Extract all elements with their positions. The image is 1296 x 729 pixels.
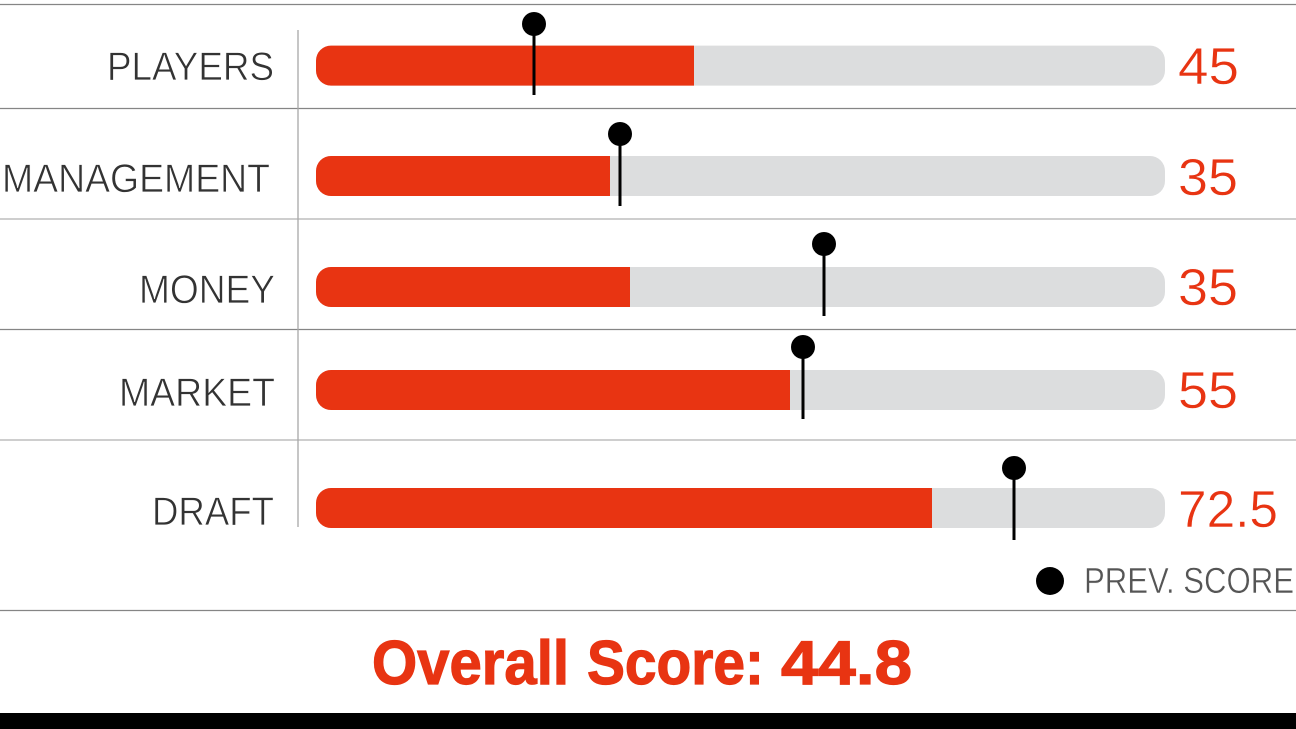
row: players xyxy=(107,12,1239,96)
row: market xyxy=(119,335,1238,420)
bar track: players xyxy=(316,46,1165,86)
bar track: draft xyxy=(316,488,1165,528)
label: market: MARKET xyxy=(119,371,275,415)
legend dot xyxy=(1036,567,1064,595)
label: management: MANAGEMENT xyxy=(2,157,270,201)
bar value: management 35 xyxy=(316,156,610,196)
bar value: draft 72.5 xyxy=(316,488,932,528)
row: draft xyxy=(152,456,1278,540)
marker: draft previous score xyxy=(1002,456,1026,540)
value: players: 45 xyxy=(1178,38,1239,96)
marker: players previous score xyxy=(522,12,546,95)
bar track: market xyxy=(316,370,1165,410)
value: draft: 72.5 xyxy=(1178,481,1278,539)
row: money xyxy=(139,232,1238,317)
legend: previous score xyxy=(1036,560,1294,601)
marker: money previous score xyxy=(812,232,836,316)
marker: market previous score xyxy=(791,335,815,419)
label: money: MONEY xyxy=(139,268,275,312)
bar value: market 55 xyxy=(316,370,790,410)
bottom black band xyxy=(0,713,1296,729)
bar track: money xyxy=(316,267,1165,307)
bar value: players 45 xyxy=(316,46,694,86)
overall score: 44.8 xyxy=(781,629,912,698)
marker: management previous score xyxy=(608,122,632,206)
overall score: Score: xyxy=(587,629,764,698)
row: management xyxy=(2,122,1238,207)
bar track: management xyxy=(316,156,1165,196)
bar value: money 35 xyxy=(316,267,630,307)
label: players: PLAYERS xyxy=(107,45,274,89)
overall score: Overall xyxy=(372,629,569,698)
value: market: 55 xyxy=(1178,362,1238,420)
value: money: 35 xyxy=(1178,259,1238,317)
value: management: 35 xyxy=(1178,149,1238,207)
label: draft: DRAFT xyxy=(152,490,274,534)
